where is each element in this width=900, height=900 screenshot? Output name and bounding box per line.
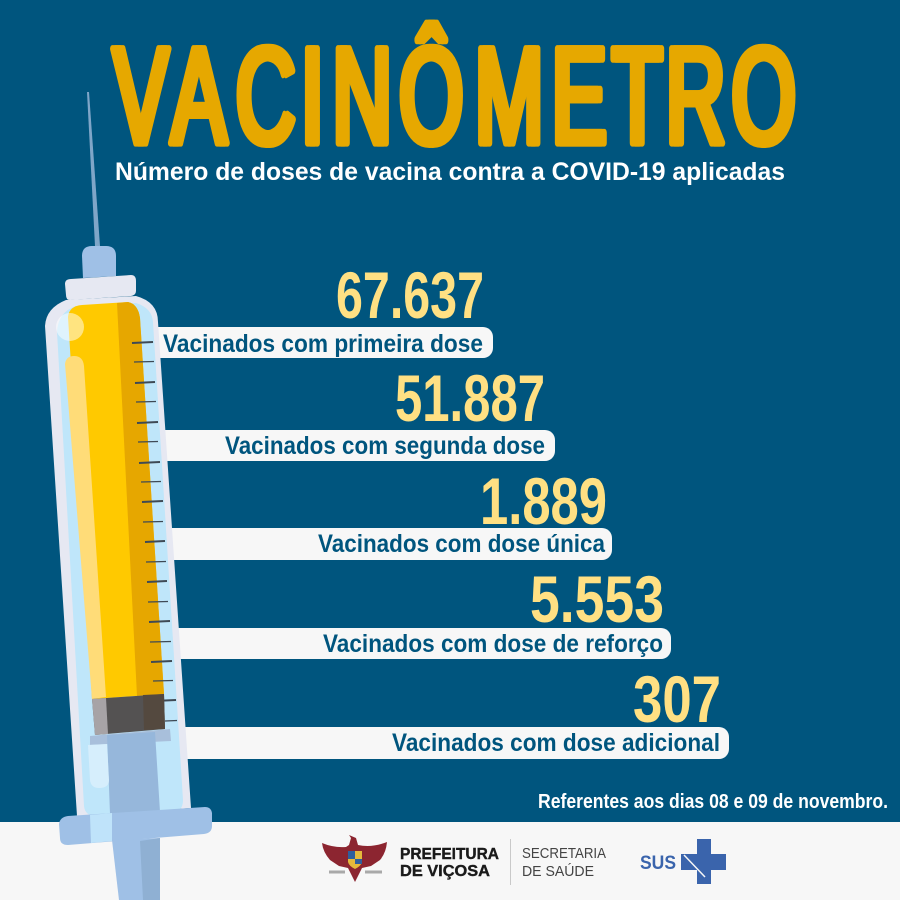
needle xyxy=(87,92,100,246)
logo text: Prefeitura de Viçosa: DE VIÇOSA xyxy=(400,863,490,880)
row: segunda dose: Vacinados com segunda dose xyxy=(225,432,545,460)
logo: SUS xyxy=(640,839,726,884)
row: primeira dose xyxy=(130,258,493,358)
row: dose adicional xyxy=(130,662,729,759)
collar xyxy=(65,275,136,300)
logo text: Secretaria de Saúde xyxy=(522,845,606,880)
bubble highlight xyxy=(56,313,84,341)
row: dose adicional: 307 xyxy=(633,662,721,736)
footer band xyxy=(0,822,900,900)
needle hub xyxy=(82,246,116,278)
subtitle: Número de doses de vacina contra a COVID-19 aplicadas xyxy=(115,158,785,186)
row: dose adicional: Vacinados com dose adicional xyxy=(392,729,720,757)
graduation ticks xyxy=(132,342,177,721)
row: dose de reforço xyxy=(130,562,671,659)
plunger shaft xyxy=(107,732,160,814)
row: dose única: Vacinados com dose única xyxy=(318,530,606,558)
row: dose de reforço: Vacinados com dose de reforço xyxy=(323,630,663,658)
logo text: Prefeitura de Viçosa: PREFEITURA xyxy=(400,846,499,863)
plunger seal xyxy=(92,694,165,735)
row: dose única xyxy=(130,464,612,560)
logo text: Prefeitura de Viçosa xyxy=(400,846,499,880)
logo text: Secretaria de Saúde: SECRETARIA xyxy=(522,845,606,862)
window highlight xyxy=(88,744,109,788)
liquid highlight xyxy=(65,356,106,699)
logo text: Secretaria de Saúde: DE SAÚDE xyxy=(522,863,594,880)
barrel xyxy=(45,296,191,816)
row: segunda dose: 51.887 xyxy=(395,361,545,435)
liquid shade xyxy=(117,302,164,696)
flange xyxy=(59,807,212,845)
barrel liquid window xyxy=(57,303,183,816)
row: dose de reforço: 5.553 xyxy=(530,562,664,636)
row: primeira dose: Vacinados com primeira dose xyxy=(163,330,483,358)
plunger head xyxy=(90,729,171,745)
logo: Prefeitura de Viçosa coat of arms xyxy=(322,835,387,882)
row: segunda dose xyxy=(130,361,555,461)
logo: SUS: SUS xyxy=(640,853,676,874)
plunger rod xyxy=(112,838,160,900)
title: VACINÔMETRO xyxy=(112,19,794,172)
row: dose única: 1.889 xyxy=(480,464,607,538)
row: primeira dose: 67.637 xyxy=(336,258,484,332)
yellow liquid xyxy=(68,302,164,699)
icon: syringe xyxy=(45,92,212,900)
